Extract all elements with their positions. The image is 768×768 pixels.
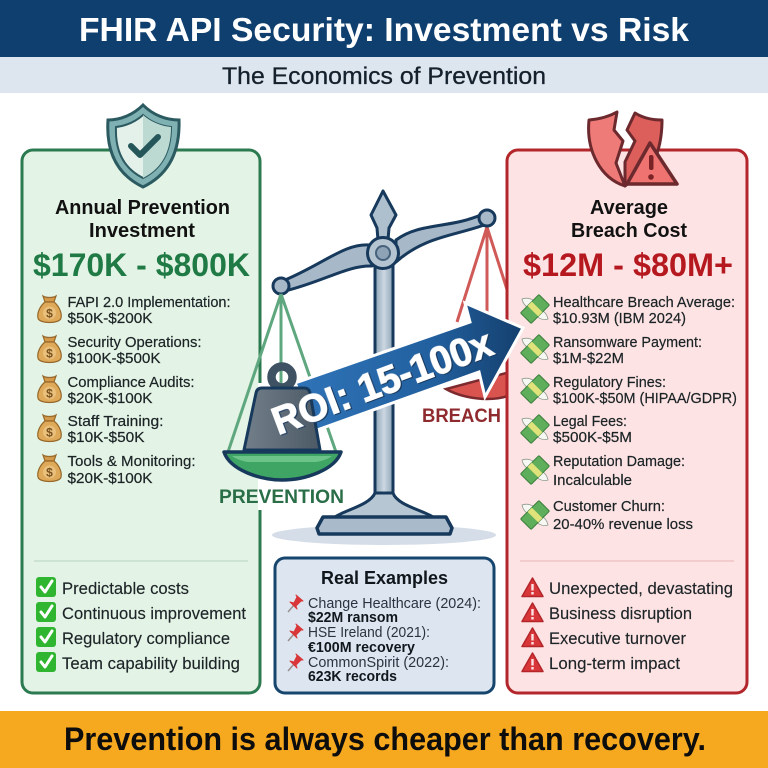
item: reputation damage: Reputation Damage: bbox=[553, 453, 685, 470]
item: compliance audits bbox=[38, 374, 194, 407]
header band: title bbox=[0, 0, 768, 57]
benefits checklist: Team capability building bbox=[62, 654, 240, 673]
benefits checklist: Regulatory compliance bbox=[62, 629, 230, 648]
item: healthcare breach average: $10.93M (IBM 2024) bbox=[553, 310, 686, 327]
left chains bbox=[228, 294, 336, 452]
example: CommonSpirit: 623K records bbox=[308, 668, 397, 685]
item: compliance audits: $20K-$100K bbox=[68, 390, 152, 407]
item: FAPI 2.0: FAPI 2.0 Implementation: bbox=[68, 294, 230, 311]
item: ransomware payment: $1M-$22M bbox=[553, 350, 624, 367]
benefits checklist: Predictable costs bbox=[62, 579, 189, 598]
risks list: Executive turnover bbox=[549, 629, 686, 648]
item: legal fees: Legal Fees: bbox=[553, 413, 627, 430]
item: tools and monitoring bbox=[38, 453, 195, 487]
right chains and pan bbox=[446, 227, 525, 399]
risks list: Long-term impact bbox=[549, 654, 680, 673]
panel: average breach cost bbox=[507, 112, 747, 693]
big range figure: $12M - $80M+ bbox=[523, 247, 733, 283]
item: healthcare breach average bbox=[521, 294, 735, 327]
item: FAPI 2.0 bbox=[38, 294, 230, 327]
item: customer churn: Customer Churn: bbox=[553, 498, 665, 515]
item: legal fees bbox=[521, 413, 632, 446]
risks list: Unexpected, devastating bbox=[549, 579, 733, 598]
icon: shield with check bbox=[108, 105, 179, 187]
weight bbox=[244, 366, 320, 450]
item: FAPI 2.0: $ bbox=[46, 306, 53, 320]
item: customer churn: 20-40% revenue loss bbox=[553, 516, 693, 533]
panel heading: Investment bbox=[89, 220, 195, 242]
item: tools and monitoring: Tools & Monitoring: bbox=[68, 453, 196, 470]
example: CommonSpirit bbox=[288, 654, 449, 685]
benefits checklist: Continuous improvement bbox=[62, 604, 246, 623]
hub bbox=[368, 238, 398, 268]
finial bbox=[371, 191, 396, 240]
big range figure: $170K - $800K bbox=[33, 247, 250, 283]
risks list bbox=[522, 578, 733, 673]
benefits checklist bbox=[36, 577, 246, 673]
panel: annual prevention investment bbox=[22, 105, 263, 693]
balance scale: weight, pan and labels bbox=[219, 366, 501, 508]
post and base bbox=[317, 262, 452, 534]
example: CommonSpirit: CommonSpirit (2022): bbox=[308, 654, 449, 671]
left pan bbox=[224, 452, 341, 480]
cost list bbox=[521, 294, 737, 533]
item: compliance audits: $ bbox=[46, 386, 53, 400]
item: staff training: $ bbox=[46, 426, 53, 440]
label: breach: BREACH bbox=[422, 406, 501, 427]
footer banner: takeaway bbox=[0, 711, 768, 768]
item: reputation damage bbox=[521, 453, 685, 489]
item: staff training: $10K-$50K bbox=[68, 429, 144, 446]
item: regulatory fines bbox=[521, 374, 737, 407]
panel heading bbox=[55, 197, 230, 242]
item: ransomware payment: Ransomware Payment: bbox=[553, 334, 702, 351]
item: healthcare breach average: Healthcare Breach Average: bbox=[553, 294, 735, 311]
panel: real examples bbox=[275, 558, 494, 693]
footer banner: takeaway: Prevention is always cheaper than recovery. bbox=[64, 721, 706, 757]
panel heading: Breach Cost bbox=[571, 220, 687, 242]
arrow: rising from prevention to breach bbox=[295, 303, 523, 430]
item: security operations bbox=[38, 334, 201, 367]
panel heading: Annual Prevention bbox=[55, 197, 230, 219]
item: reputation damage: Incalculable bbox=[553, 472, 632, 489]
example: Change Healthcare: $22M ransom bbox=[308, 609, 398, 626]
panel heading bbox=[571, 197, 687, 242]
item: tools and monitoring: $20K-$100K bbox=[68, 470, 152, 487]
scale shadow bbox=[272, 525, 496, 545]
risks list: Business disruption bbox=[549, 604, 692, 623]
example: Change Healthcare: Change Healthcare (2024): bbox=[308, 595, 481, 612]
example: HSE Ireland: HSE Ireland (2021): bbox=[308, 624, 430, 641]
subtitle band: The Economics of Prevention bbox=[222, 63, 546, 90]
arrow label: ROI 15-100x: ROI: 15-100x bbox=[266, 322, 499, 443]
item: security operations: $100K-$500K bbox=[68, 350, 160, 367]
beam bbox=[273, 210, 495, 294]
item: customer churn bbox=[521, 498, 693, 533]
item: staff training: Staff Training: bbox=[68, 413, 164, 430]
item: security operations: Security Operations: bbox=[68, 334, 202, 351]
item: ransomware payment bbox=[521, 334, 702, 367]
item: regulatory fines: Regulatory Fines: bbox=[553, 374, 666, 391]
balance scale: stand, beam and chains bbox=[228, 191, 525, 545]
example: HSE Ireland: €100M recovery bbox=[308, 639, 416, 656]
item: compliance audits: Compliance Audits: bbox=[68, 374, 194, 391]
cost list bbox=[38, 294, 230, 487]
item: regulatory fines: $100K-$50M (HIPAA/GDPR) bbox=[553, 390, 737, 407]
panel heading: Average bbox=[590, 197, 668, 219]
item: security operations: $ bbox=[46, 346, 53, 360]
example: Change Healthcare bbox=[288, 595, 481, 626]
item: staff training bbox=[38, 413, 164, 446]
label: prevention: PREVENTION bbox=[219, 487, 344, 508]
icon: broken shield with warning bbox=[589, 112, 677, 186]
subtitle band bbox=[0, 57, 768, 93]
examples heading: Real Examples bbox=[321, 568, 448, 588]
header band: title: FHIR API Security: Investment vs Risk bbox=[79, 11, 690, 48]
item: FAPI 2.0: $50K-$200K bbox=[68, 310, 152, 327]
item: tools and monitoring: $ bbox=[46, 466, 53, 480]
example: HSE Ireland bbox=[288, 624, 430, 656]
item: legal fees: $500K-$5M bbox=[553, 429, 632, 446]
